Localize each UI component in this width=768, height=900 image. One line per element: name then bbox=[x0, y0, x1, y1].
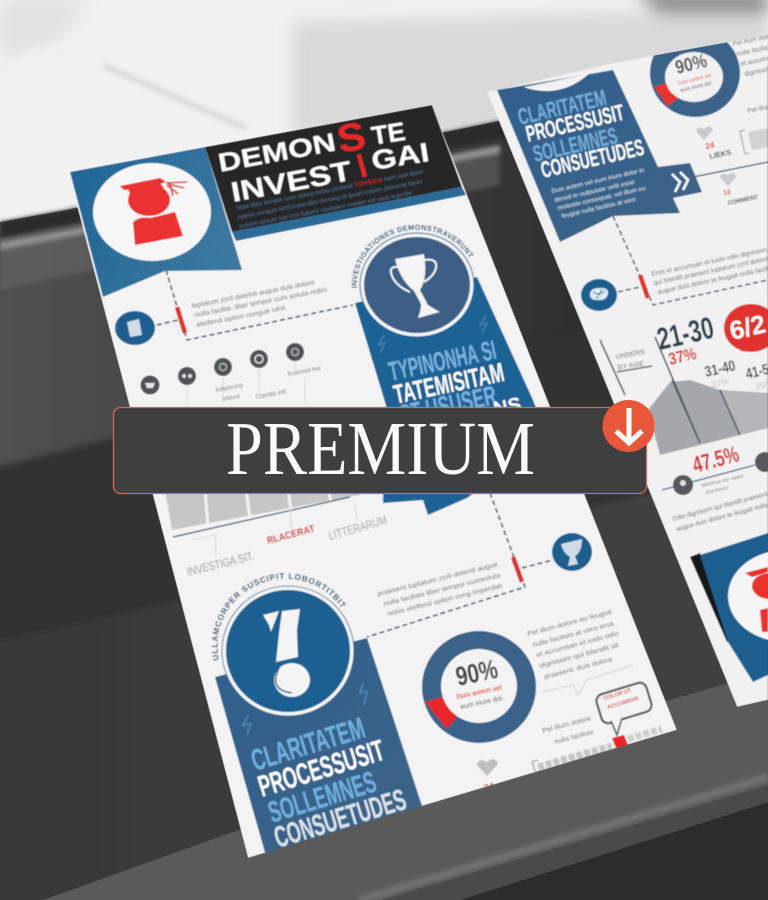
text block: pel illum: praesent. duis dolore bbox=[544, 656, 614, 681]
title: demonste investigai: S bbox=[334, 114, 369, 162]
text block: praesent: nulla facilisis liber tempor cumsoluta bbox=[383, 572, 501, 608]
icon: download arrow badge bbox=[602, 400, 654, 452]
text block: eros: qui blandit praesent luptatum zzril delenit bbox=[653, 256, 768, 287]
panel: claritatem bbox=[215, 638, 425, 870]
text block: pel illum: Pel illum dolore eu feugiat bbox=[527, 609, 613, 638]
age area chart: 21-30 bbox=[654, 310, 717, 357]
panel: typinonha: TYPINONHA SI bbox=[386, 335, 499, 387]
age area chart: 31-40 bbox=[703, 357, 737, 381]
subtitle text: Nam liber tempor cum soluta nobis eleifend bbox=[236, 184, 353, 212]
bar chart behind banner: LITTERARUM bbox=[327, 513, 389, 543]
bar chart behind banner: RLACERAT bbox=[266, 524, 316, 547]
text block: pel illum: nulla facilisis at vero eros bbox=[532, 620, 615, 649]
poster 2: right sheet bbox=[487, 29, 768, 707]
title: demonste investigai: TE bbox=[369, 116, 408, 151]
age area chart: 37% bbox=[667, 344, 698, 369]
banner label: PREMIUM bbox=[226, 407, 535, 491]
stat 47.5 percent: Maximus est vatem bbox=[701, 473, 744, 489]
panel: claritatem flag: CLARITATEM bbox=[515, 84, 609, 130]
stat 47.5 percent: augue duis dolore te feugait nulla bbox=[676, 502, 768, 533]
age area chart: 27% bbox=[710, 376, 730, 390]
header: blue flag bbox=[70, 147, 242, 297]
dashed connector with small trophy bbox=[367, 493, 592, 637]
text block: pel illum: dignissim qui blandit sit bbox=[539, 642, 620, 670]
premium banner bbox=[114, 407, 646, 494]
text block: eros bbox=[651, 247, 768, 296]
icon: graduate bbox=[93, 163, 211, 261]
text block: feptatum bbox=[191, 279, 329, 329]
circle: trophy with arc text: INVESTIGATIONES DEMONSTRAVERUNT bbox=[351, 224, 474, 288]
title: demonste investigai: DEMON bbox=[216, 127, 338, 178]
header: black title band bbox=[205, 105, 466, 241]
panel: claritatem flag: PROCESSUSIT bbox=[523, 99, 627, 147]
donut chart 90 percent: 90% bbox=[673, 51, 709, 79]
subtitle text: nam sed diam bbox=[383, 169, 424, 183]
title: demonste investigai: I bbox=[353, 147, 371, 186]
icon row with labels: elitsed bbox=[222, 394, 240, 403]
circle: trophy with arc text bbox=[351, 224, 474, 338]
subtitle text: option congue nihil imperdiet doming id quod mazim placerat facer bbox=[237, 179, 423, 221]
second header with graduate icon bbox=[690, 533, 768, 682]
dashed connector with book icon bbox=[115, 270, 353, 345]
red speech bubble 6/2: 6/2 bbox=[727, 309, 768, 346]
stats: likes and comments bbox=[696, 32, 768, 207]
subtitle text bbox=[236, 169, 424, 230]
bar chart behind banner bbox=[166, 494, 388, 576]
panel: claritatem: CONSUETUDES bbox=[270, 783, 410, 855]
title: demonste investigai: GAI bbox=[369, 137, 431, 176]
panel: claritatem: SOLLEMNES bbox=[264, 766, 380, 830]
title: demonste investigai bbox=[218, 122, 429, 202]
divider line to stats bbox=[693, 162, 768, 177]
callout: color bubble and waffle row: nulla facilisis bbox=[554, 729, 595, 746]
panel: typinonha: ST USUSER bbox=[397, 380, 499, 430]
text block: feptatum: nulla facilisi. liber tempor cum soluta nobis bbox=[194, 286, 329, 319]
age area chart: BY AGE bbox=[617, 360, 645, 372]
bar chart behind banner: INVESTIGA SIT. bbox=[185, 549, 256, 579]
icon: medal bbox=[263, 609, 310, 697]
panel: claritatem flag: feugiat nulla facilisis at vero bbox=[561, 197, 637, 220]
panel: typinonha bbox=[355, 277, 548, 515]
age area chart bbox=[600, 310, 768, 455]
stats: likes and comments: 24 bbox=[705, 140, 716, 151]
text block: eros: Eros et accumsan et iusto odio dignissim bbox=[651, 247, 768, 278]
panel: claritatem flag: SOLLEMNES bbox=[530, 122, 620, 167]
icon row with labels bbox=[140, 343, 322, 404]
circle: medal with arc text bbox=[211, 572, 354, 716]
text block: feptatum: eleifend option congue nihil bbox=[196, 305, 286, 329]
stat 47.5 percent: 47.5% bbox=[690, 441, 742, 478]
text block: praesent bbox=[377, 561, 503, 618]
icon row with labels: Clarida est bbox=[255, 388, 287, 401]
title: demonste investigai: INVEST bbox=[228, 155, 354, 208]
callout: color bubble and waffle row: COLOR UT bbox=[603, 688, 633, 702]
donut chart 90 percent: Duis autem vel bbox=[677, 73, 712, 87]
stat 47.5 percent bbox=[662, 441, 768, 533]
age area chart: UNDERS bbox=[615, 349, 646, 361]
icon: trophy bbox=[391, 254, 440, 318]
callout: color bubble and waffle row: Pel illum dolore bbox=[542, 715, 592, 735]
panel: claritatem flag bbox=[497, 70, 702, 242]
subtitle text: possim assum typi non habent claritatem insitam est usus legentis bbox=[239, 191, 412, 230]
callout: color bubble and waffle row bbox=[532, 665, 662, 773]
donut chart 90 percent bbox=[422, 631, 536, 743]
donut chart 90 percent bbox=[649, 42, 741, 118]
text block: eros: augue duis dolore te feugait nulla facilisi bbox=[657, 265, 768, 296]
callout: color bubble and waffle row: ACCUMSAN bbox=[607, 696, 639, 711]
panel: claritatem: PROCESSUSIT bbox=[254, 734, 388, 804]
stats: likes: 24 bbox=[483, 781, 495, 793]
panel: claritatem flag: dered in vulputate velit esse bbox=[554, 179, 636, 204]
subtitle text: TIPISOA bbox=[354, 178, 384, 189]
circle: medal with arc text: ULLAMCORPER SUSCIPIT LOBORTITBIT bbox=[211, 572, 347, 662]
text block: feptatum: feptatum zzril deleinit augue duis dolore bbox=[191, 279, 315, 310]
icon row with labels: Adipiscing bbox=[215, 383, 243, 394]
dashed connector with brain icon bbox=[581, 216, 768, 311]
panel: typinonha: TATEMISITAM bbox=[391, 357, 507, 410]
panel: claritatem flag: Duis autem vel eum iriure dolor in bbox=[551, 168, 645, 195]
stats: likes and comments: COMMENT bbox=[727, 195, 759, 207]
shelf lip bbox=[43, 672, 768, 900]
panel: typinonha: NS bbox=[491, 394, 523, 421]
panel: claritatem flag: CONSUETUDES bbox=[538, 134, 646, 183]
poster 1: main sheet bbox=[70, 105, 677, 858]
stats: likes and comments: 12 bbox=[723, 189, 732, 197]
panel: claritatem flag: molestie consequat, vel illum eu bbox=[557, 186, 646, 212]
panel: claritatem: CLARITATEM bbox=[247, 712, 369, 778]
donut chart 90 percent: eum iriure dol. bbox=[460, 695, 505, 711]
stats: likes and comments: LIEKS bbox=[709, 148, 732, 161]
text block: praesent: praesent luptatum zzril delenit augue bbox=[377, 561, 499, 598]
donut chart 90 percent: 90% bbox=[453, 654, 500, 692]
stat 47.5 percent: processus bbox=[705, 485, 729, 496]
donut chart 90 percent: Duis autem vel bbox=[456, 685, 502, 701]
text block: pel illum: et accumsan et iusto odio bbox=[536, 630, 620, 659]
text block: pel illum bbox=[527, 609, 620, 681]
text block: praesent: nobis eleifend option cong imperdiet bbox=[387, 583, 503, 618]
stats: likes bbox=[476, 758, 498, 787]
icon row with labels: Euismod tea bbox=[287, 366, 322, 378]
donut chart 90 percent: eum iriure dol bbox=[680, 81, 712, 94]
